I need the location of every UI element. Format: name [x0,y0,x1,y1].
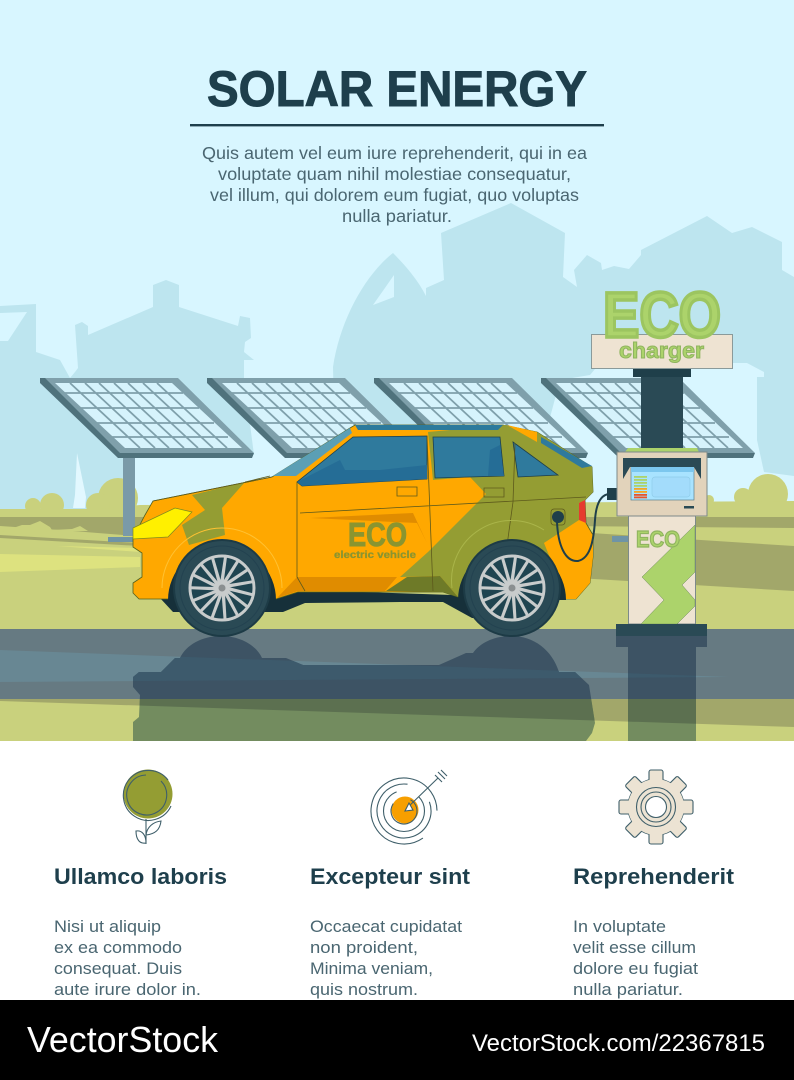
road [0,629,794,741]
title: SOLAR ENERGY [207,61,587,117]
body: column 2: non proident, [310,938,418,957]
windows [297,436,558,486]
body: column 2: Occaecat cupidatat [310,917,462,936]
charger base [616,624,707,636]
front wheel [174,540,270,636]
body: column 3 [573,917,698,999]
heading: Excepteur sint: Excepteur sint [310,864,471,889]
background sky [0,0,794,741]
car eco subtitle: electric vehicle [334,549,416,561]
body: column 1: consequat. Duis [54,959,182,978]
car and charger reflection [133,636,707,741]
car underbody shadow [160,590,545,618]
icon: flower [123,770,172,844]
body: column 3: In voluptate [573,917,666,936]
electric car [133,425,593,636]
car orange body [133,425,593,599]
solar panel 2 [207,378,421,458]
rear wheel [464,540,560,636]
body: column 3: nulla pariatur. [573,980,683,999]
body: column 2: quis nostrum. [310,980,418,999]
city skyline silhouette [0,203,794,509]
taillight [579,500,586,523]
charger head [617,448,707,516]
solar panel 4 [541,378,755,542]
intro paragraph [202,143,587,226]
heading: Ullamco laboris: Ullamco laboris [54,864,227,889]
battery level bars [634,476,647,498]
icon: target with arrow [358,765,450,857]
charger station [592,279,732,636]
eco charger sign board [592,334,732,368]
body: column 3: dolore eu fugiat [573,959,698,978]
sign pole [633,369,691,449]
charger column [628,516,696,624]
car rear olive area [400,425,593,597]
icon: gear [619,770,693,844]
body: column 2: Minima veniam, [310,959,433,978]
lower door shading [277,513,458,598]
charge port [551,509,565,525]
background bushes [25,474,788,518]
body: column 1 [54,917,201,999]
solar panel 1 [40,378,254,542]
body: column 1: ex ea commodo [54,938,182,957]
headlight [133,508,192,539]
car front olive stripe [182,482,245,545]
intro paragraph: nulla pariatur. [342,206,452,226]
solar panel 3 [374,378,588,458]
body: column 2 [310,917,462,999]
wheel arch highlights [162,528,282,588]
intro paragraph: voluptate quam nihil molestiae consequatur, [218,164,571,184]
footer url: VectorStock.com/22367815 [472,1030,765,1057]
heading: Reprehenderit: Reprehenderit [573,864,735,889]
column zigzag [641,525,695,624]
body: column 1: aute irure dolor in. [54,980,201,999]
title rule [190,124,604,126]
roof trim and accent [273,425,592,476]
body: column 3: velit esse cillum [573,938,696,957]
intro paragraph: Quis autem vel eum iure reprehenderit, qui in ea [202,143,587,163]
wheel arches [168,546,566,600]
charging cable and plug [557,488,617,561]
door lines and handles [153,436,586,591]
column ECO text: ECO [636,526,680,552]
sign ECO text: ECO [603,279,721,351]
car eco logo: ECO [348,516,407,553]
ground with bands [0,501,794,629]
footer bar [0,1000,794,1080]
body: column 1: Nisi ut aliquip [54,917,161,936]
footer logo: VectorStock [27,1019,219,1060]
intro paragraph: vel illum, qui dolorem eum fugiat, quo voluptas [210,185,579,205]
sign charger text: charger [619,338,704,363]
car rear bumper [544,522,593,599]
lower white panel [0,741,794,1001]
